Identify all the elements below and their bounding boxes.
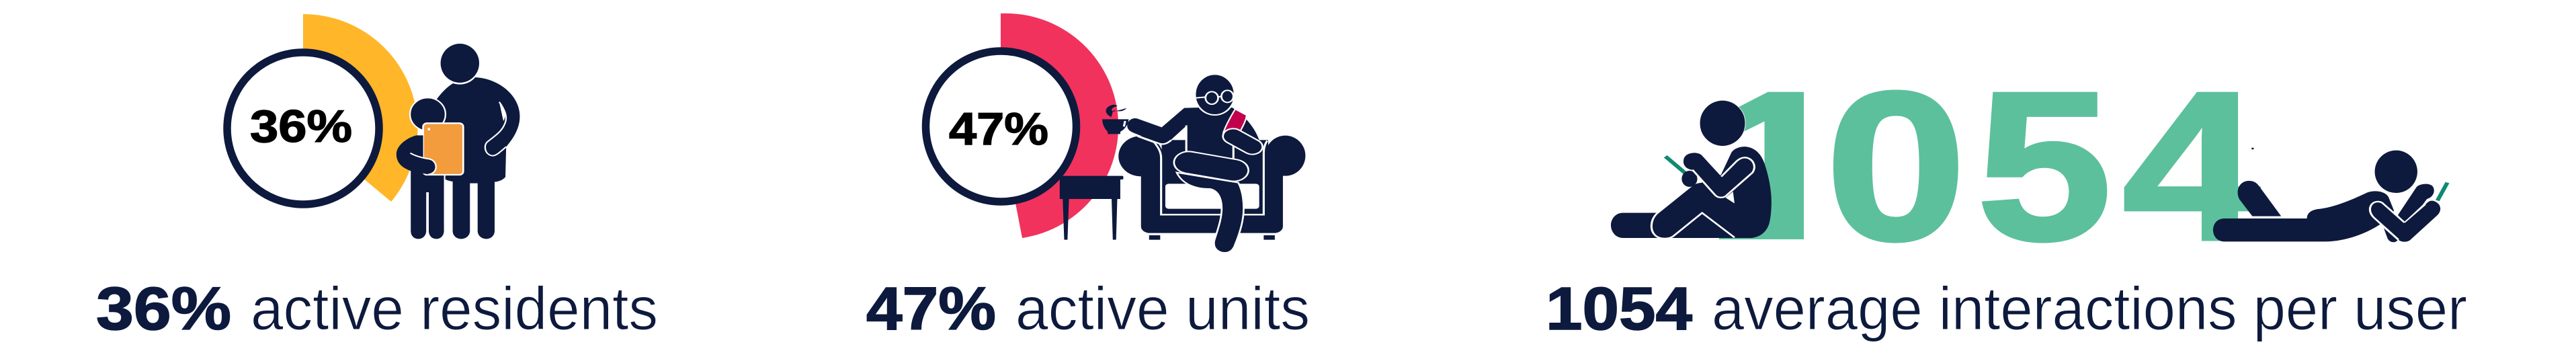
ring with 36%: 36% xyxy=(250,101,352,152)
head xyxy=(1700,100,1745,146)
icon: person in armchair with coffee and phone xyxy=(1060,74,1305,253)
thigh xyxy=(1189,163,1234,170)
ring with 47%: 47% xyxy=(949,104,1048,155)
head with glasses xyxy=(1195,74,1235,115)
big number 1054 xyxy=(1719,90,2261,243)
stray dot xyxy=(2251,148,2254,149)
big number 1054: 0 xyxy=(1825,48,1966,284)
phone xyxy=(1665,157,1686,173)
big number 1054: 1 xyxy=(1704,48,1853,284)
sitter xyxy=(1124,74,1259,253)
coffee cup xyxy=(1102,105,1128,134)
side table xyxy=(1060,176,1123,240)
ring with 47% xyxy=(926,51,1077,202)
big number 1054: 5 xyxy=(1977,48,2112,284)
caption: 47% active units xyxy=(866,276,1310,343)
caption: 36% active residents: 36% xyxy=(96,276,231,343)
panel: active units xyxy=(866,13,1310,343)
pie sector: 36% xyxy=(303,14,418,202)
pie sector: 47% xyxy=(1001,13,1118,238)
big number 1054: 4 xyxy=(2122,48,2261,284)
panel: average interactions xyxy=(1549,90,2466,341)
child's arm xyxy=(397,135,436,174)
panel: active residents xyxy=(96,14,658,343)
torso and legs xyxy=(1611,147,1772,238)
armchair xyxy=(1118,136,1305,240)
forearm xyxy=(1233,136,1252,147)
near arm xyxy=(2370,201,2440,242)
leg and torso xyxy=(2213,191,2394,241)
ring with 36% xyxy=(227,52,379,204)
caption: 36% active residents: active residents xyxy=(251,276,658,343)
adult xyxy=(435,44,520,239)
head xyxy=(2375,151,2417,193)
far arm xyxy=(2398,184,2434,222)
caption: 47% active units: active units xyxy=(1015,276,1310,343)
caption: 47% active units: 47% xyxy=(866,276,996,343)
lower leg xyxy=(1177,173,1244,253)
tablet xyxy=(423,123,463,175)
phone xyxy=(2438,183,2448,200)
caption: 1054 average interactions per user: 1054 xyxy=(1546,276,1692,343)
icon: adult and child with tablet xyxy=(397,44,520,239)
child xyxy=(410,97,446,239)
icon: person sitting with phone xyxy=(1611,100,1772,239)
hand xyxy=(1681,171,1698,187)
phone xyxy=(1223,109,1247,133)
icon: person reclining with phone xyxy=(2213,148,2448,242)
raised knee xyxy=(2238,181,2281,216)
caption: 1054 average interactions per user: average interactions per user xyxy=(1712,276,2467,343)
arms xyxy=(1684,153,1754,198)
